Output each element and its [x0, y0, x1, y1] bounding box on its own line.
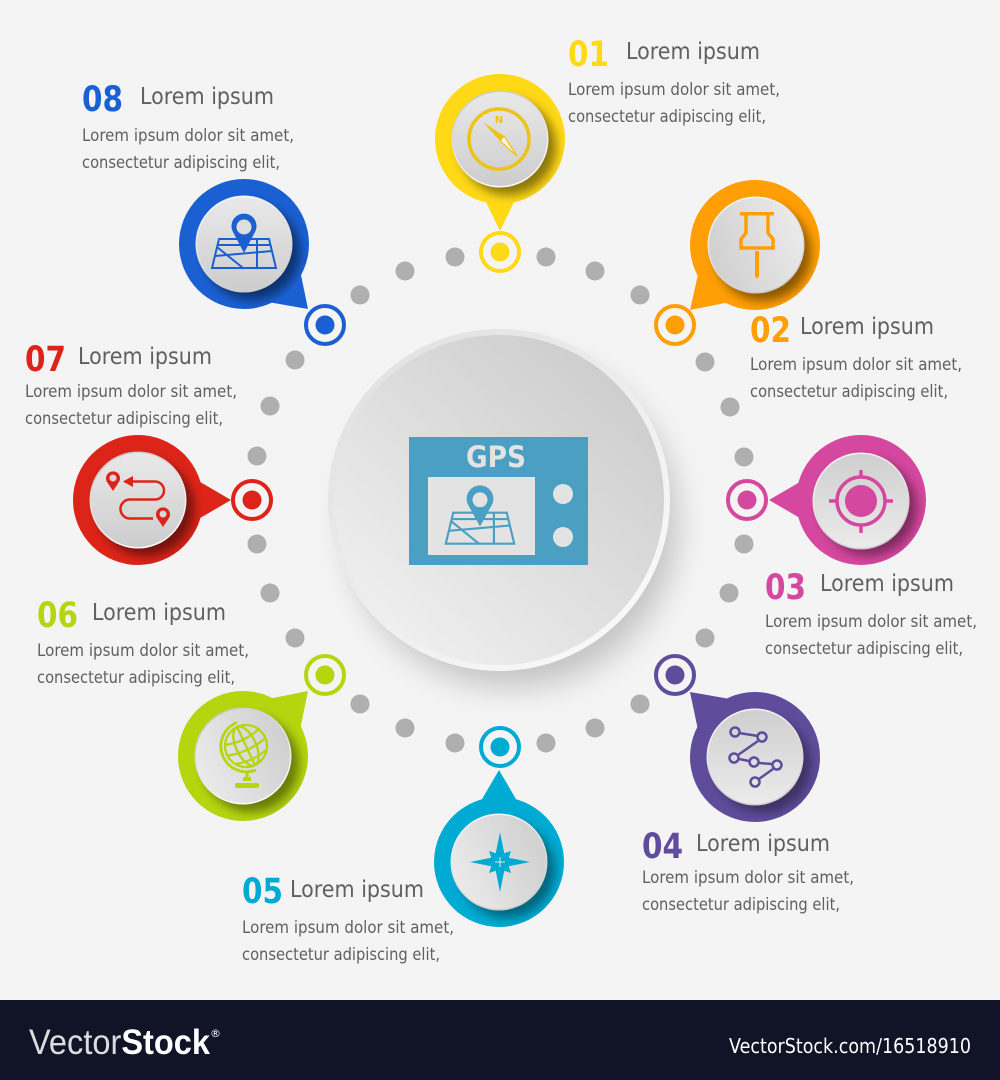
text block 07: Lorem ipsum — [78, 344, 212, 370]
pin 04: nodes, purple — [656, 656, 820, 822]
target marker — [728, 481, 766, 519]
text block 06: Lorem ipsum dolor sit amet, — [37, 641, 249, 661]
pin 06: globe, lime — [178, 656, 344, 821]
icon: crosshair — [829, 470, 893, 533]
text block 05: consectetur adipiscing elit, — [242, 945, 440, 965]
footer logo: VectorStock — [29, 1023, 210, 1062]
text block 06: Lorem ipsum — [92, 600, 226, 626]
text block 01: 01 — [568, 35, 609, 75]
text block 06: consectetur adipiscing elit, — [37, 668, 235, 688]
text block 04 — [642, 827, 854, 915]
text block 08: 08 — [82, 80, 123, 120]
target marker — [306, 656, 344, 694]
text block 06 — [37, 596, 249, 688]
icon: push pin — [740, 212, 774, 279]
icon: compass: N — [495, 115, 503, 126]
registered mark: ® — [210, 1027, 221, 1040]
text block 04: Lorem ipsum — [696, 831, 830, 857]
pin 05: wind rose, cyan — [434, 728, 564, 927]
icon: GPS device: GPS — [466, 440, 526, 474]
text block 05: Lorem ipsum — [290, 877, 424, 903]
icon: GPS device — [409, 437, 588, 565]
central GPS disc — [328, 329, 677, 687]
text block 03: consectetur adipiscing elit, — [765, 639, 963, 659]
dotted ring of gray dots — [248, 248, 754, 752]
target marker — [656, 306, 694, 344]
text block 04: Lorem ipsum dolor sit amet, — [642, 868, 854, 888]
text block 03: Lorem ipsum dolor sit amet, — [765, 612, 977, 632]
pin 08: map, blue — [179, 179, 344, 344]
text block 08: consectetur adipiscing elit, — [82, 153, 280, 173]
target marker — [481, 233, 519, 271]
text block 08: Lorem ipsum — [140, 84, 274, 110]
pin 07: route, red — [73, 435, 271, 565]
text block 04: consectetur adipiscing elit, — [642, 895, 840, 915]
text block 05: 05 — [242, 872, 283, 912]
text block 01: consectetur adipiscing elit, — [568, 107, 766, 127]
text block 02: consectetur adipiscing elit, — [750, 382, 948, 402]
text block 06: 06 — [37, 596, 78, 636]
text block 05 — [242, 872, 454, 965]
text block 08: Lorem ipsum dolor sit amet, — [82, 126, 294, 146]
text block 02: 02 — [750, 311, 791, 351]
target marker — [656, 656, 694, 694]
pin 03: target, magenta — [728, 435, 926, 565]
icon: globe on stand — [218, 718, 274, 788]
text block 03: Lorem ipsum — [820, 571, 954, 597]
text block 01 — [568, 35, 780, 127]
target marker — [481, 728, 519, 766]
text block 01: Lorem ipsum — [626, 39, 760, 65]
target marker — [306, 306, 344, 344]
pin 02: push pin, orange — [656, 180, 820, 344]
footer bar — [0, 1000, 1000, 1080]
icon: route between two pins — [106, 471, 170, 527]
text block 07: Lorem ipsum dolor sit amet, — [25, 382, 237, 402]
text block 02 — [750, 311, 962, 402]
footer image id: VectorStock.com/16518910 — [729, 1034, 971, 1058]
text block 04: 04 — [642, 827, 683, 867]
text block 02: Lorem ipsum dolor sit amet, — [750, 355, 962, 375]
text block 01: Lorem ipsum dolor sit amet, — [568, 80, 780, 100]
text block 07: 07 — [25, 340, 66, 380]
icon: wind rose — [470, 832, 530, 892]
text block 03: 03 — [765, 568, 806, 608]
text block 05: Lorem ipsum dolor sit amet, — [242, 918, 454, 938]
pin 01: compass, yellow — [435, 74, 565, 271]
text block 08 — [82, 80, 294, 173]
text block 03 — [765, 568, 977, 659]
icon: compass — [469, 109, 529, 169]
icon: map with location pin — [212, 214, 276, 268]
text block 02: Lorem ipsum — [800, 314, 934, 340]
target marker — [233, 481, 271, 519]
icon: connected nodes — [730, 728, 782, 786]
text block 07 — [25, 340, 237, 429]
text block 07: consectetur adipiscing elit, — [25, 409, 223, 429]
